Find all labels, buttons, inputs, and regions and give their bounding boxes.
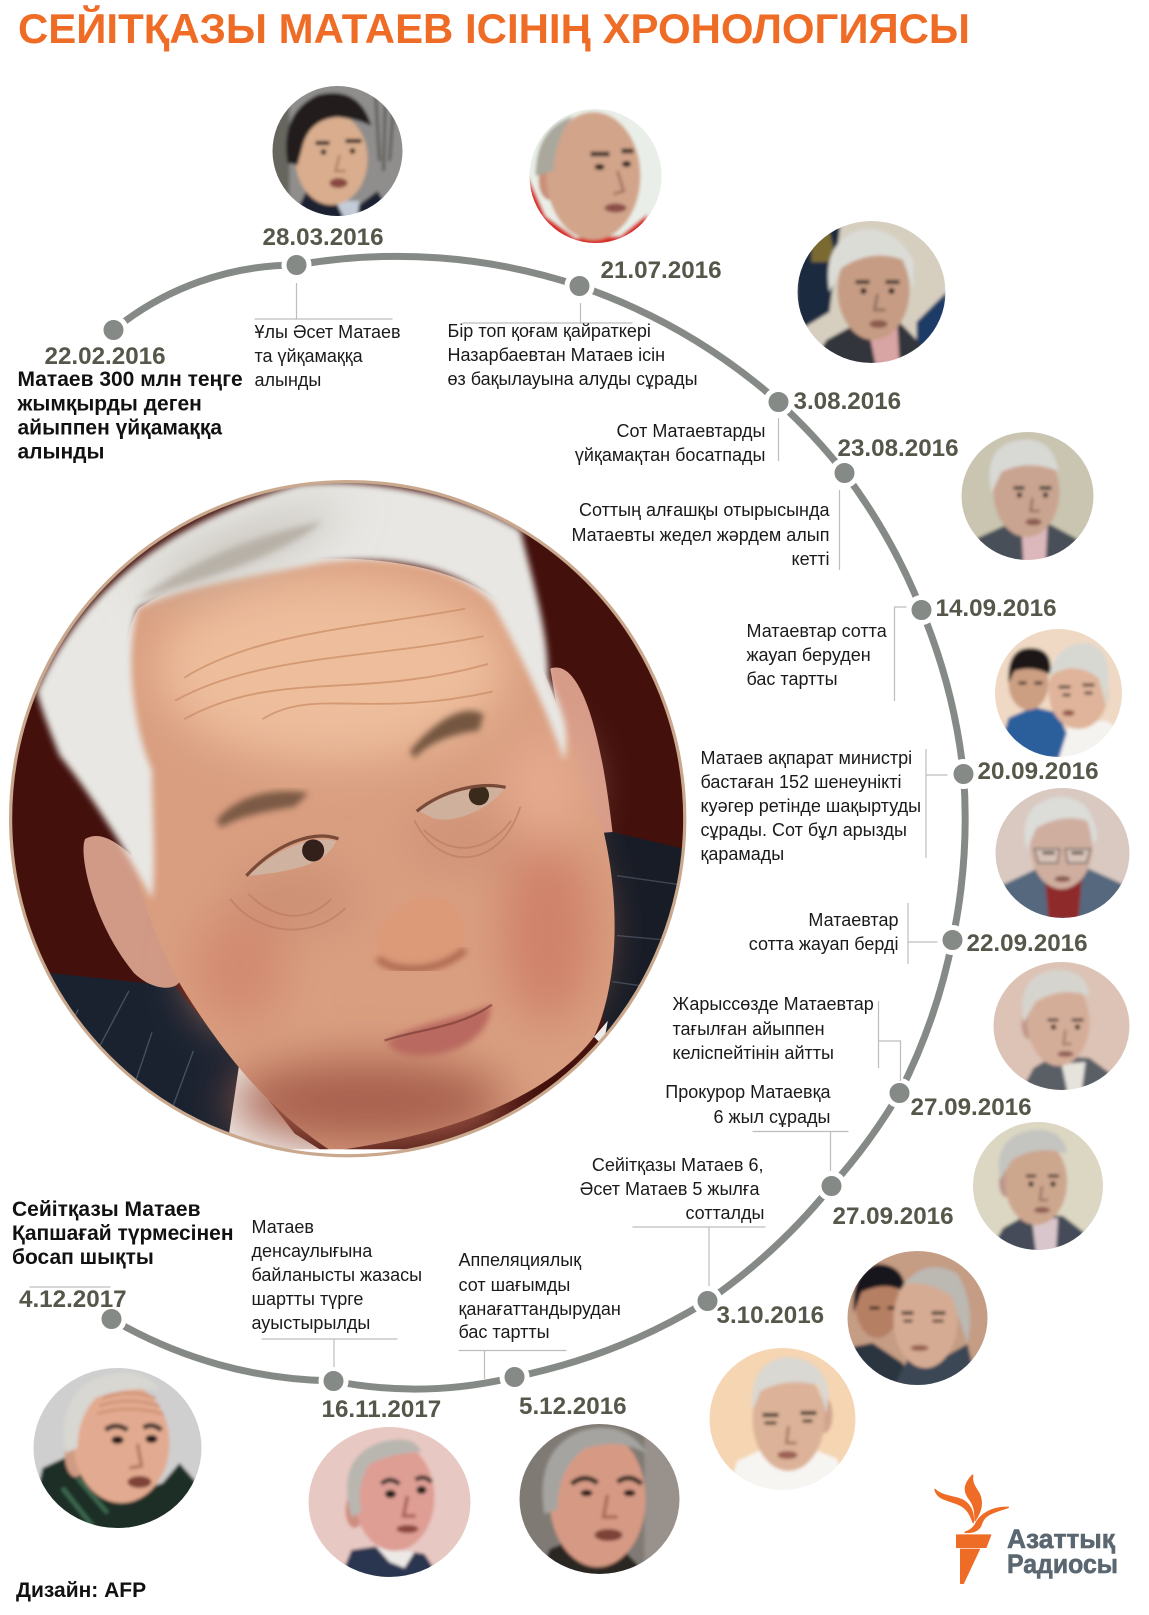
event: 27.09.2016 closing statements — [672, 994, 1108, 1256]
event: 22.02.2016 — [16, 318, 243, 464]
marker — [284, 252, 309, 278]
description: Матаев ақпарат министрі — [700, 748, 912, 768]
marker — [695, 1288, 720, 1314]
logo text: Радиосы — [1007, 1549, 1118, 1579]
marker — [321, 1368, 346, 1394]
event: 5.12.2016 — [458, 1250, 684, 1579]
photo — [308, 1427, 470, 1577]
marker — [101, 318, 126, 342]
event: 3.08.2016 — [575, 217, 946, 465]
date: 20.09.2016 — [978, 758, 1099, 785]
leader line — [894, 607, 906, 701]
marker — [909, 598, 934, 622]
marker — [940, 928, 965, 952]
date: 16.11.2017 — [322, 1396, 441, 1423]
description: алынды — [254, 370, 321, 390]
description: Сейітқазы Матаев — [12, 1198, 201, 1221]
description: Матаев 300 млн теңге — [18, 368, 243, 391]
description: ауыстырылды — [252, 1313, 370, 1333]
description: келіспейтінін айтты — [672, 1043, 834, 1063]
description: Әсет Матаев 5 жылға — [580, 1179, 760, 1199]
description: босап шықты — [12, 1246, 154, 1269]
description: айыппен үйқамаққа — [18, 416, 222, 440]
description: Матаевтар — [808, 910, 898, 930]
description: Сот Матаевтарды — [616, 421, 766, 441]
description: бас тартты — [746, 669, 838, 689]
description: өз бақылауына алуды сұрады — [448, 369, 698, 389]
date: 3.08.2016 — [794, 388, 901, 415]
date: 27.09.2016 — [910, 1094, 1032, 1121]
logo: Azattyq Radiosy — [935, 1475, 1118, 1583]
leader line — [926, 749, 948, 858]
marker — [887, 1080, 912, 1106]
title: СЕЙІТҚАЗЫ МАТАЕВ ІСІНІҢ ХРОНОЛОГИЯСЫ — [18, 4, 970, 52]
main portrait photo — [0, 470, 700, 1170]
description: сот шағымды — [458, 1275, 570, 1295]
description: куәгер ретінде шақыртуды — [700, 796, 921, 816]
photo — [848, 1251, 988, 1385]
photo — [973, 1122, 1103, 1250]
leader line — [254, 283, 392, 319]
event: 28.03.2016 — [254, 81, 408, 390]
leader line — [632, 1227, 766, 1286]
description: кетті — [792, 549, 830, 569]
photo — [996, 788, 1130, 918]
description: байланысты жазасы — [252, 1265, 422, 1285]
leader line — [778, 418, 780, 461]
description: 6 жыл сұрады — [714, 1107, 830, 1127]
description: шартты түрге — [252, 1289, 363, 1309]
event: 27.09.2016 prosecutor request — [665, 1082, 992, 1388]
description: денсаулығына — [252, 1241, 373, 1261]
description: үйқамақтан босатпады — [575, 445, 766, 465]
event: 20.09.2016 — [700, 748, 1132, 923]
description: сотталды — [685, 1203, 764, 1223]
date: 27.09.2016 — [832, 1203, 954, 1230]
marker — [832, 460, 857, 486]
date: 3.10.2016 — [716, 1302, 824, 1329]
photo — [994, 962, 1130, 1090]
event: 3.10.2016 — [580, 1155, 858, 1494]
description: жауап беруден — [746, 645, 871, 665]
description: сұрады. Сот бұл арызды — [700, 820, 907, 840]
date: 21.07.2016 — [600, 257, 722, 284]
description: Сейітқазы Матаев 6, — [592, 1155, 764, 1175]
description: жымқырды деген — [16, 392, 202, 416]
description: бастаған 152 шенеунікті — [700, 772, 901, 792]
description: қарамады — [700, 844, 784, 864]
description: тағылған айыппен — [672, 1019, 825, 1039]
description: Жарыссөзде Матаевтар — [672, 994, 874, 1014]
marker — [99, 1306, 124, 1332]
photo — [708, 1344, 858, 1494]
photo — [962, 432, 1094, 560]
leader line — [878, 1001, 900, 1081]
marker — [766, 390, 791, 414]
date: 5.12.2016 — [519, 1393, 627, 1420]
photo — [796, 217, 946, 367]
event: 4.12.2017 — [12, 1198, 234, 1533]
credit: Дизайн: AFP — [16, 1579, 146, 1602]
photo — [520, 1424, 680, 1574]
description: Матаевтар сотта — [746, 621, 888, 641]
leader line — [908, 903, 938, 964]
marker — [819, 1174, 844, 1198]
marker — [502, 1364, 527, 1390]
description: Прокурор Матаевқа — [665, 1082, 831, 1102]
description: Матаевты жедел жәрдем алып — [571, 525, 830, 545]
leader line — [838, 490, 840, 570]
date: 23.08.2016 — [838, 435, 959, 462]
event: 14.09.2016 — [746, 595, 1128, 763]
description: Аппеляциялық — [458, 1250, 581, 1270]
date: 22.09.2016 — [966, 930, 1088, 957]
description: Соттың алғашқы отырысында — [579, 500, 830, 520]
event: 23.08.2016 — [571, 426, 1098, 570]
description: Бір топ қоғам қайраткері — [448, 321, 651, 341]
marker — [567, 274, 592, 298]
photo — [530, 109, 662, 243]
event: 22.09.2016 — [749, 903, 1132, 1096]
logo text: Азаттық — [1007, 1524, 1115, 1554]
timeline arc — [112, 256, 965, 1389]
leader line — [462, 303, 632, 323]
date: 22.02.2016 — [44, 343, 166, 370]
event: 16.11.2017 — [252, 1217, 474, 1582]
leader line — [458, 1350, 566, 1379]
description: Ұлы Әсет Матаев — [254, 322, 401, 342]
description: Назарбаевтан Матаев ісін — [448, 345, 665, 365]
description: қанағаттандырудан — [458, 1299, 621, 1319]
date: 28.03.2016 — [262, 224, 384, 251]
date: 4.12.2017 — [19, 1286, 127, 1313]
photo — [272, 86, 402, 216]
leader line — [262, 1339, 398, 1367]
icon: torch — [935, 1475, 1008, 1583]
leader line — [752, 1132, 848, 1171]
photo — [34, 1368, 202, 1528]
description: сотта жауап берді — [749, 934, 898, 954]
description: алынды — [18, 440, 104, 464]
description: та үйқамаққа — [254, 346, 364, 366]
marker — [951, 762, 976, 786]
date: 14.09.2016 — [936, 595, 1057, 622]
description: бас тартты — [458, 1322, 550, 1342]
leader line — [30, 1286, 110, 1288]
photo — [995, 629, 1122, 757]
description: Қапшағай түрмесінен — [12, 1222, 234, 1245]
description: Матаев — [252, 1217, 314, 1237]
event: 21.07.2016 — [448, 106, 722, 389]
